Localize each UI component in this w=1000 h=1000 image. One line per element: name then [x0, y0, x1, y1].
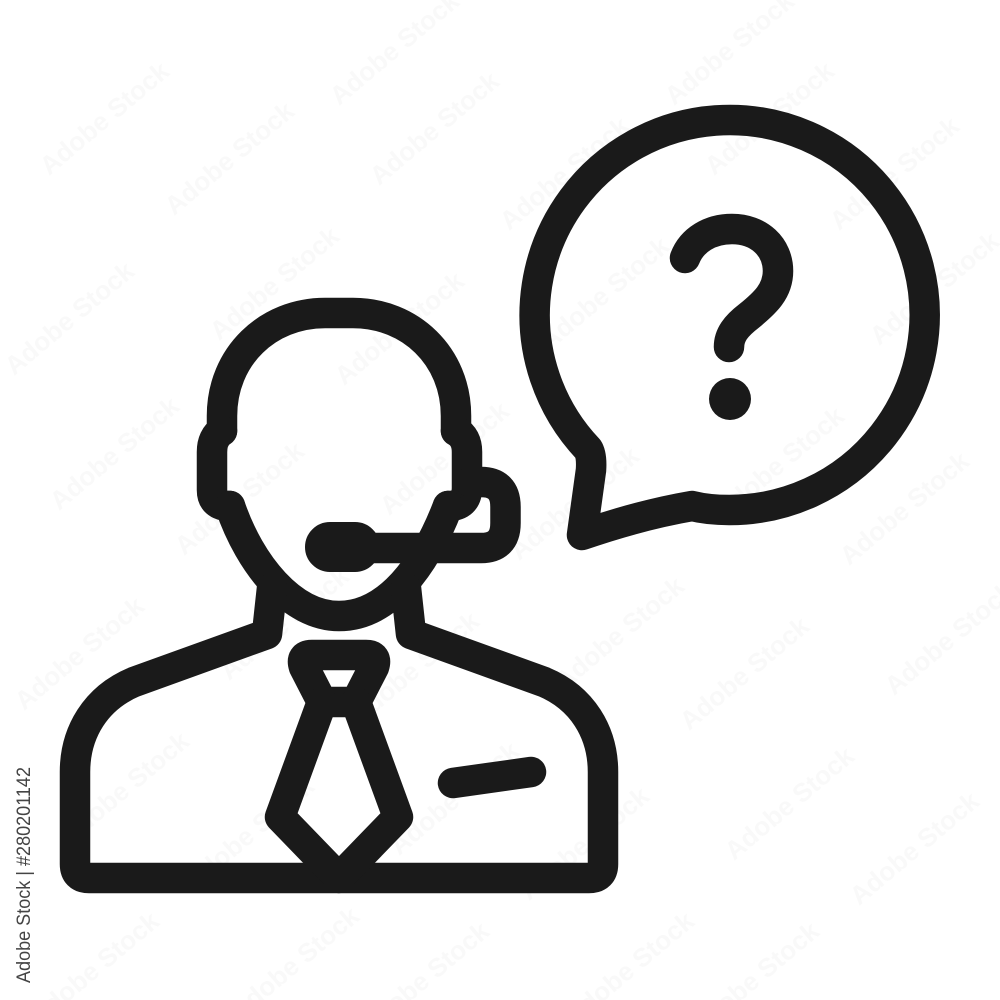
question mark dot	[709, 378, 751, 420]
watermark pattern: Adobe Stock	[699, 55, 840, 181]
watermark pattern: Adobe Stock	[344, 605, 485, 731]
watermark pattern: Adobe Stock	[674, 610, 815, 736]
icon: agent with headset	[75, 120, 925, 878]
neck and shoulders body	[75, 588, 603, 878]
left ear cup	[212, 431, 230, 506]
question mark hook	[685, 229, 778, 347]
watermark pattern: Adobe Stock	[364, 65, 505, 191]
watermark pattern: Adobe Stock	[329, 265, 470, 391]
watermark pattern: Adobe Stock	[504, 440, 645, 566]
badge pocket line	[453, 772, 531, 783]
watermark pattern: Adobe Stock	[374, 395, 515, 521]
watermark pattern: Adobe Stock	[709, 400, 850, 526]
head outline	[222, 313, 456, 431]
speech bubble	[535, 120, 925, 535]
watermark pattern: Adobe Stock	[834, 445, 975, 571]
watermark pattern: Adobe Stock	[514, 780, 655, 906]
watermark pattern: Adobe Stock	[204, 220, 345, 346]
watermark pattern: Adobe Stock	[34, 55, 175, 181]
right ear cup	[448, 431, 467, 506]
watermark pattern: Adobe Stock	[494, 110, 635, 236]
watermark pattern: Adobe Stock	[9, 590, 150, 716]
watermark pattern: Adobe Stock	[159, 95, 300, 221]
watermark pattern: Adobe Stock	[384, 735, 525, 861]
watermark pattern: Adobe Stock	[824, 110, 965, 236]
watermark pattern: Adobe Stock	[54, 725, 195, 851]
watermark pattern: Adobe Stock	[844, 785, 985, 911]
tie blade	[280, 702, 398, 878]
stock id label: Adobe Stock | #280201142	[14, 767, 35, 983]
watermark pattern: Adobe Stock	[169, 435, 310, 561]
watermark pattern: Adobe Stock	[719, 740, 860, 866]
watermark pattern: Adobe Stock	[549, 570, 690, 696]
face and chin	[230, 506, 448, 616]
watermark pattern: Adobe Stock	[534, 230, 675, 356]
watermark pattern: Adobe Stock	[179, 770, 320, 896]
headset microphone	[320, 537, 365, 557]
headset microphone arm	[360, 482, 506, 548]
watermark pattern: Adobe Stock	[44, 390, 185, 516]
watermark pattern: Adobe Stock	[214, 560, 355, 686]
tie knot	[303, 655, 375, 702]
watermark pattern: Adobe Stock	[0, 255, 140, 381]
